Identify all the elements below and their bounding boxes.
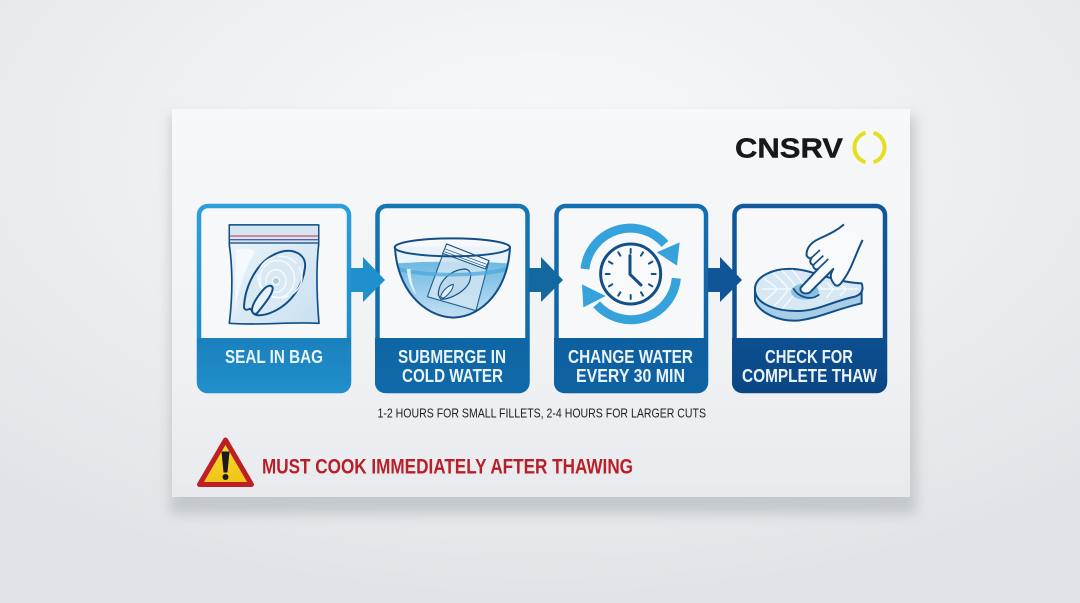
arrow 1 bbox=[351, 257, 385, 302]
step 1: seal in bag bbox=[197, 206, 351, 393]
icon: clock with refresh arrows bbox=[582, 228, 680, 320]
icon: finger pressing salmon fillet bbox=[755, 224, 863, 321]
caption text: CHECK FOR bbox=[765, 347, 853, 367]
caption text: SEAL IN BAG bbox=[225, 347, 323, 367]
icon: salmon in sealed bag bbox=[229, 225, 319, 324]
icon: warning triangle bbox=[200, 440, 252, 484]
card frame bbox=[199, 206, 349, 391]
arrow 3 bbox=[708, 257, 742, 302]
step 3: change water every 30 min bbox=[554, 206, 708, 393]
step 4: check for complete thaw bbox=[732, 206, 887, 393]
caption band bbox=[375, 338, 530, 393]
poster panel bbox=[170, 109, 916, 514]
caption text: SUBMERGE IN bbox=[398, 347, 506, 367]
arrow 2 bbox=[529, 257, 563, 302]
logo ring bbox=[854, 133, 885, 162]
step 3: change water every 30 min: EVERY 30 MIN bbox=[576, 366, 685, 386]
logo: CNSRV bbox=[735, 132, 885, 164]
caption band bbox=[197, 338, 351, 393]
warning text: MUST COOK IMMEDIATELY AFTER THAWING bbox=[262, 456, 633, 478]
icon: bag in bowl of water bbox=[395, 238, 510, 318]
step 2: submerge in cold water: COLD WATER bbox=[402, 366, 503, 386]
card frame bbox=[378, 206, 528, 391]
card frame bbox=[734, 206, 885, 391]
caption band bbox=[554, 338, 708, 393]
caption band bbox=[732, 338, 887, 393]
step 2: submerge in cold water bbox=[375, 206, 530, 393]
logo wordmark: CNSRV bbox=[735, 132, 843, 164]
step 4: check for complete thaw: COMPLETE THAW bbox=[742, 366, 877, 386]
card frame bbox=[556, 206, 706, 391]
timing note: 1-2 HOURS FOR SMALL FILLETS, 2-4 HOURS FOR LARGER CUTS bbox=[378, 406, 706, 420]
caption text: CHANGE WATER bbox=[568, 347, 693, 367]
